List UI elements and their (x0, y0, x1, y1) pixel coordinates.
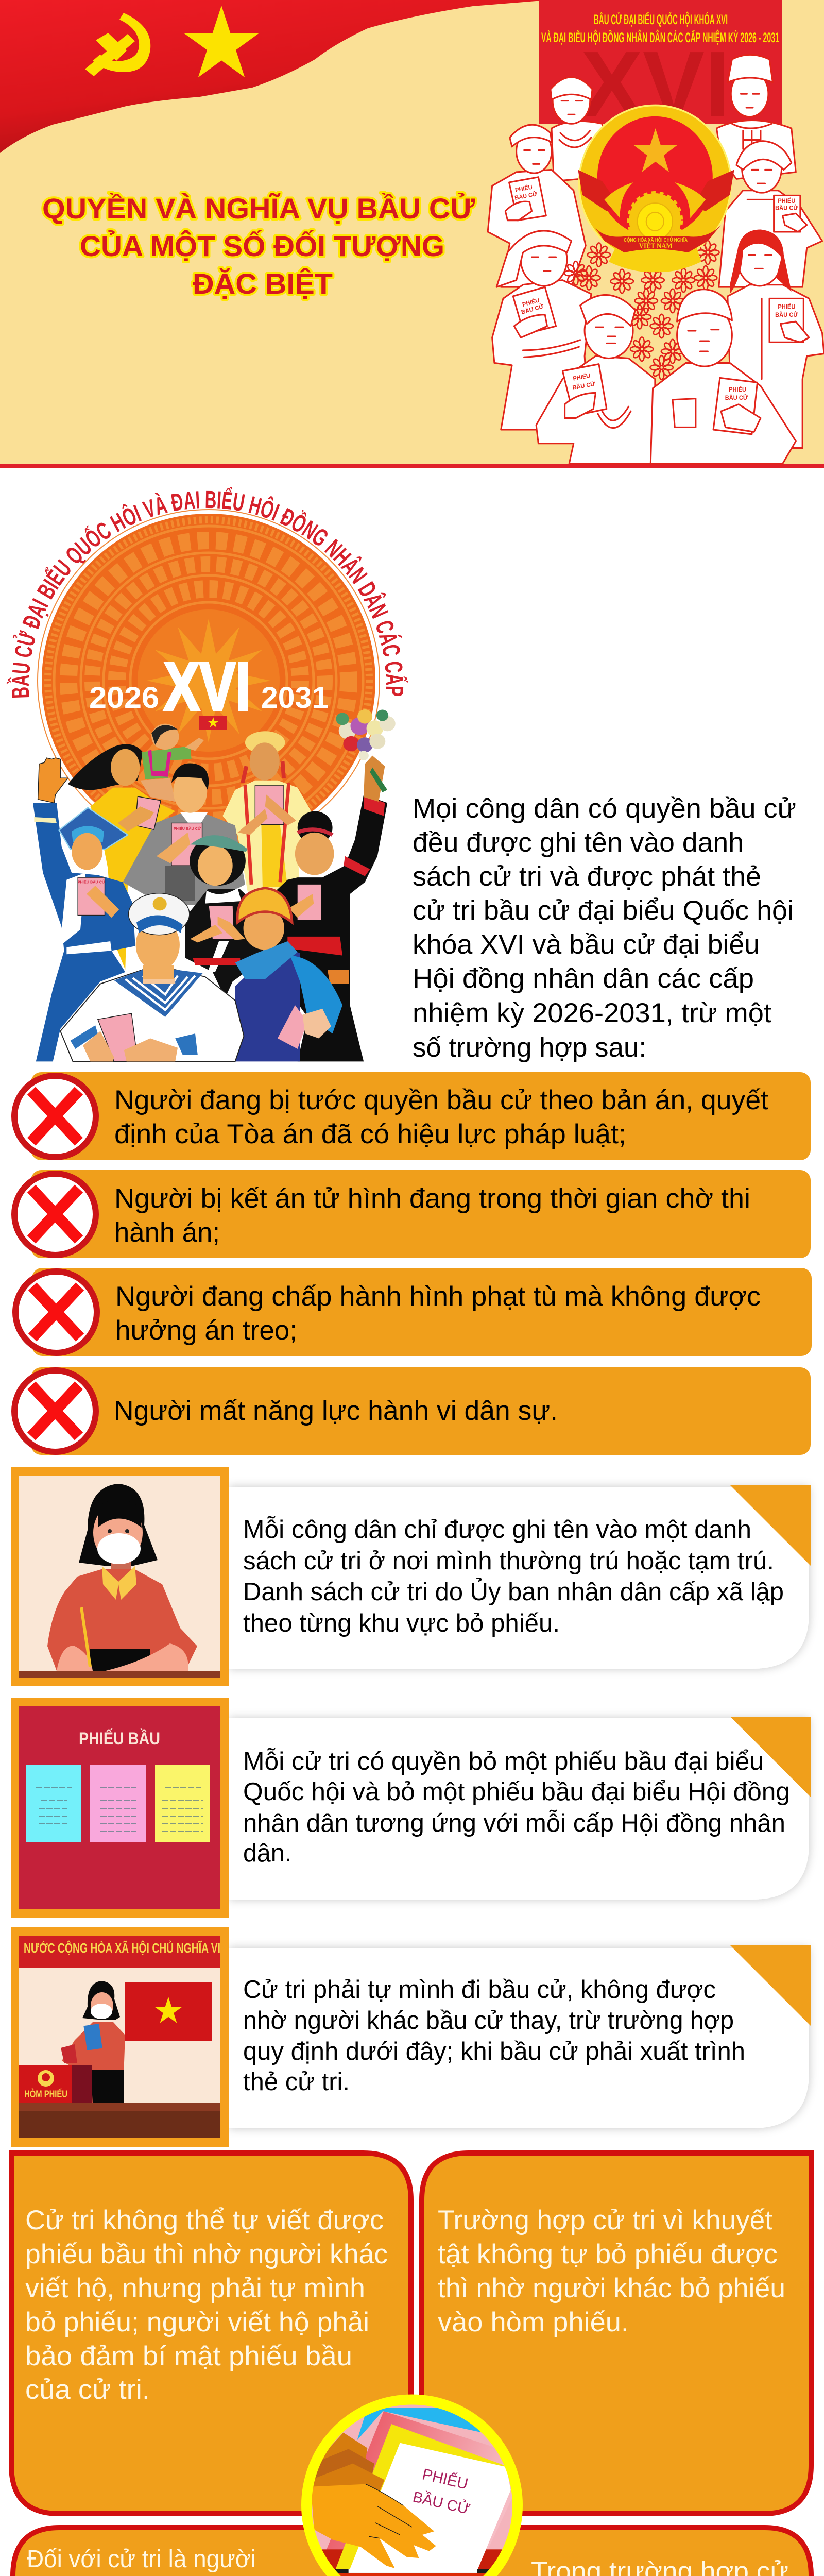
header banner (0, 0, 824, 468)
text: nhân dân tương ứng với mỗi cấp Hội đồng nhân (243, 1809, 785, 1837)
figure front right: BẦU CỬ (725, 395, 748, 401)
panel: detained voter (13, 2528, 402, 2576)
text (243, 1748, 790, 1867)
emblem of Vietnam: VIỆT NAM (639, 242, 673, 250)
panel: exclusion 4 (14, 1367, 811, 1455)
bronze drum (38, 510, 380, 852)
figure front right: PHIẾU (729, 386, 746, 393)
cream background (0, 0, 824, 464)
intro text: Hội đồng nhân dân các cấp (413, 963, 754, 994)
icon: red cross (14, 1174, 96, 1255)
text: phiếu bầu thì nhờ người khác (25, 2239, 388, 2269)
medallion picture: BẦU CỬ (411, 2488, 472, 2518)
boy with flag (140, 724, 204, 802)
text (25, 2205, 388, 2405)
icon: hammer and sickle (85, 13, 150, 76)
intro text: Mọi công dân có quyền bầu cử (413, 793, 796, 824)
text: Danh sách cử tri do Ủy ban nhân dân cấp xã lập (243, 1578, 784, 1606)
small flag (199, 716, 227, 730)
figure top left (551, 77, 607, 181)
panel: vote in person (11, 1927, 811, 2147)
figure lower left: BẦU CỬ (521, 303, 544, 316)
text: Trường hợp cử tri vì khuyết (438, 2205, 772, 2235)
illustration: ballots (11, 1698, 229, 1918)
poster heading (541, 11, 779, 45)
panel: voter with disability (422, 2153, 811, 2514)
orange corner (730, 1485, 811, 1566)
panel: sick or elderly voter (414, 2528, 811, 2576)
bouquet (336, 709, 396, 792)
emblem of Vietnam (578, 105, 734, 272)
worker (235, 888, 342, 1061)
icon: hand dropping ballot medallion (306, 2400, 518, 2576)
figure upper left: BẦU CỬ (514, 191, 538, 201)
XVI watermark: XVI (581, 32, 730, 136)
figure upper right: BẦU CỬ (775, 205, 798, 212)
waving party flag (0, 0, 549, 153)
text: quy định dưới đây; khi bầu cử phải xuất trình (243, 2038, 745, 2065)
text: nhờ người khác bầu cử thay, trừ trường hợp (243, 2007, 734, 2035)
panel: exclusion 1 (14, 1072, 811, 1160)
election logo (6, 487, 408, 1062)
intro text (413, 793, 796, 1063)
orange corner (730, 1717, 811, 1797)
icon: red cross (15, 1272, 97, 1353)
man in gray suit: PHIẾU BẦU CỬ (174, 826, 201, 831)
illustration: woman writing (11, 1467, 229, 1686)
title: QUYỀN VÀ NGHĨA VỤ BẦU CỬ (42, 192, 475, 225)
text: Mỗi cử tri có quyền bỏ một phiếu bầu đại biểu (243, 1748, 764, 1775)
girl in green hat (185, 836, 265, 998)
text: bỏ phiếu; người viết hộ phải (25, 2307, 369, 2337)
intro text: cử tri bầu cử đại biểu Quốc hội (413, 895, 794, 926)
yellow ring (306, 2400, 518, 2576)
exclusion 3 text (115, 1281, 761, 1346)
raised hand (38, 758, 68, 803)
text (243, 1516, 784, 1637)
figure upper left: PHIẾU (514, 183, 533, 194)
panel: one ballot (11, 1698, 811, 1918)
title: ĐẶC BIỆT (193, 267, 333, 300)
woman with blue robe details (33, 803, 135, 1061)
figure lower right: PHIẾU (778, 303, 795, 311)
figure lower left (492, 231, 591, 430)
XVI and years (89, 649, 329, 724)
emblem of Vietnam: CỘNG HÒA XÃ HỘI CHỦ NGHĨA (624, 237, 688, 243)
exclusion 1 text: Người đang bị tước quyền bầu cử theo bản án, quyết (114, 1085, 768, 1115)
figure front left: BẦU CỬ (572, 380, 596, 392)
exclusion 3 text: Người đang chấp hành hình phạt tù mà không được (115, 1281, 761, 1312)
card body (229, 1948, 809, 2128)
sailor (60, 893, 244, 1061)
icon: red cross (14, 1370, 96, 1452)
ballot of yellow woman (118, 796, 161, 832)
figure front left: PHIẾU (573, 372, 591, 382)
election poster illustration (488, 0, 824, 464)
exclusion 4 text: Người mất năng lực hành vi dân sự. (114, 1396, 558, 1426)
exclusion 1 text (114, 1085, 768, 1149)
election logo: BẦU CỬ ĐẠI BIỂU QUỐC HỘI VÀ ĐẠI BIỂU HỘI ĐỒNG NHÂN DÂN CÁC CẤP (6, 487, 408, 698)
exclusion 1 text: định của Tòa án đã có hiệu lực pháp luật; (114, 1119, 626, 1149)
XVI and years: 2026 (89, 681, 159, 715)
orange corner (730, 1945, 811, 2026)
illustration: woman voting: HÒM PHIẾU (24, 2089, 67, 2100)
text: Mỗi công dân chỉ được ghi tên vào một danh (243, 1516, 751, 1544)
figure upper right: PHIẾU (778, 198, 795, 205)
text: dân. (243, 1839, 291, 1867)
exclusion 2 text (114, 1183, 750, 1248)
text (438, 2205, 785, 2337)
panel: exclusion 3 (15, 1268, 812, 1356)
exclusion 2 text: hành án; (114, 1217, 220, 1248)
medallion picture: PHIẾU (421, 2465, 470, 2493)
text: theo từng khu vực bỏ phiếu. (243, 1609, 560, 1637)
red bottom rule (0, 464, 824, 468)
text: bảo đảm bí mật phiếu bầu (25, 2341, 352, 2371)
illustration: woman voting: NƯỚC CỘNG HÒA XÃ HỘI CHỦ NGHĨA VIỆ (24, 1940, 227, 1956)
figure upper right (719, 141, 822, 287)
panel: one voter list (11, 1467, 811, 1686)
figure top right (716, 55, 796, 179)
intro text: khóa XVI và bầu cử đại biểu (413, 929, 760, 960)
figure lower right: BẦU CỬ (775, 312, 798, 318)
text: Cử tri không thể tự viết được (25, 2205, 384, 2235)
text: Cử tri phải tự mình đi bầu cử, không được (243, 1976, 716, 2004)
people line art (488, 55, 824, 464)
illustration: woman voting (11, 1927, 229, 2147)
exclusion 3 text: hưởng án treo; (115, 1315, 297, 1346)
text (243, 1976, 745, 2096)
icon: yellow star (184, 6, 259, 77)
icon: red cross (14, 1076, 96, 1157)
text: Đối với cử tri là người (27, 2546, 256, 2573)
intro text: số trường hợp sau: (413, 1032, 646, 1063)
woman in yellow (68, 744, 175, 970)
text: vào hòm phiếu. (438, 2307, 629, 2337)
flowers (564, 241, 719, 380)
text: của cử tri. (25, 2375, 150, 2405)
figure upper left (488, 125, 586, 287)
figure lower right (728, 230, 824, 448)
figure front right (650, 290, 796, 464)
text: viết hộ, nhưng phải tự mình (25, 2273, 365, 2303)
text: thì nhờ người khác bỏ phiếu (438, 2273, 785, 2303)
exclusion 2 text: Người bị kết án tử hình đang trong thời gian chờ thi (114, 1183, 750, 1214)
intro text: đều được ghi tên vào danh (413, 827, 744, 858)
text: thẻ cử tri. (243, 2068, 350, 2096)
figure front left (536, 295, 655, 464)
woman with blue robe details: PHIẾU BẦU CỬ (78, 879, 105, 884)
intro text: sách cử tri và được phát thẻ (413, 861, 761, 892)
text: tật không tự bỏ phiếu được (438, 2239, 778, 2269)
illustration: ballots: PHIẾU BẦU (79, 1729, 160, 1749)
title: CỦA MỘT SỐ ĐỐI TƯỢNG (80, 230, 444, 262)
red poster panel (539, 0, 782, 124)
medallion picture (309, 2402, 517, 2576)
panel: voter cannot write (11, 2153, 411, 2514)
intro text: nhiệm kỳ 2026-2031, trừ một (413, 998, 771, 1028)
panel: exclusion 2 (14, 1170, 811, 1258)
text: sách cử tri ở nơi mình thường trú hoặc tạm trú. (243, 1547, 774, 1575)
curved logo text (29, 508, 386, 698)
woman in black dress (265, 756, 387, 1061)
man in gray suit (123, 763, 245, 906)
people illustration (33, 709, 396, 1061)
XVI and years: 2031 (261, 681, 329, 715)
XVI and years: XVI (164, 649, 250, 724)
figure lower left: PHIẾU (522, 297, 540, 308)
man in turban (222, 731, 313, 892)
card body (229, 1718, 809, 1900)
text: Quốc hội và bỏ một phiếu bầu đại biểu Hội đồng (243, 1778, 790, 1806)
card body (229, 1487, 809, 1669)
title (42, 192, 475, 300)
